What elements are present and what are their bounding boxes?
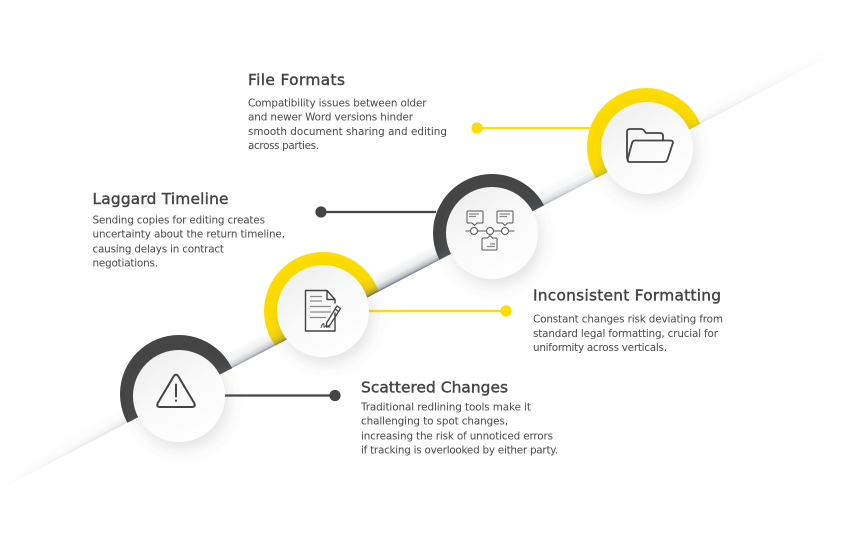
heading: inconsistent formatting: Inconsistent Formatting <box>533 287 721 305</box>
icon: warning triangle <box>157 375 195 407</box>
description: laggard timeline: negotiations. <box>92 258 158 270</box>
heading: file formats: File Formats <box>248 71 345 89</box>
description: scattered changes: challenging to spot changes, <box>361 416 508 428</box>
description: file formats: across parties. <box>248 140 319 152</box>
connector: scattered changes <box>222 390 341 401</box>
heading: scattered changes: Scattered Changes <box>361 379 508 397</box>
disc: file formats <box>601 102 693 194</box>
description: inconsistent formatting: Constant changes risk deviating from <box>533 314 723 326</box>
connector: file formats <box>471 122 592 134</box>
description: laggard timeline: causing delays in contract <box>92 243 224 255</box>
description: scattered changes <box>360 401 558 457</box>
description: scattered changes: if tracking is overlooked by either party. <box>361 445 558 457</box>
connector: laggard timeline <box>315 206 436 218</box>
description: file formats: and newer Word versions hinder <box>248 112 414 124</box>
description: file formats <box>248 98 447 152</box>
icon: signed document <box>306 290 340 331</box>
text block: scattered changes <box>360 379 558 457</box>
disc: laggard timeline <box>446 187 538 279</box>
description: scattered changes: increasing the risk of unnoticed errors <box>361 430 553 442</box>
heading: laggard timeline: Laggard Timeline <box>92 190 228 208</box>
text block: laggard timeline <box>92 190 285 270</box>
connector: inconsistent formatting <box>365 305 512 317</box>
disc: scattered changes <box>133 350 225 442</box>
text block: file formats <box>248 71 447 152</box>
description: laggard timeline: Sending copies for editing creates <box>92 214 265 226</box>
description: file formats: Compatibility issues between older <box>248 98 427 110</box>
rings behind the discs <box>120 88 705 453</box>
description: laggard timeline: uncertainty about the return timeline, <box>92 229 285 241</box>
icon: timeline with comments <box>466 211 514 250</box>
description: laggard timeline <box>92 214 285 270</box>
disc: inconsistent formatting <box>277 265 369 357</box>
description: inconsistent formatting <box>533 314 723 354</box>
diagonal shaded band <box>34 76 790 471</box>
description: inconsistent formatting: standard legal formatting, crucial for <box>533 328 719 340</box>
icon: folder <box>627 129 673 162</box>
text block: inconsistent formatting <box>533 287 723 354</box>
description: inconsistent formatting: uniformity across verticals. <box>533 342 667 354</box>
description: scattered changes: Traditional redlining tools make it <box>360 401 531 413</box>
description: file formats: smooth document sharing and editing <box>248 126 447 138</box>
